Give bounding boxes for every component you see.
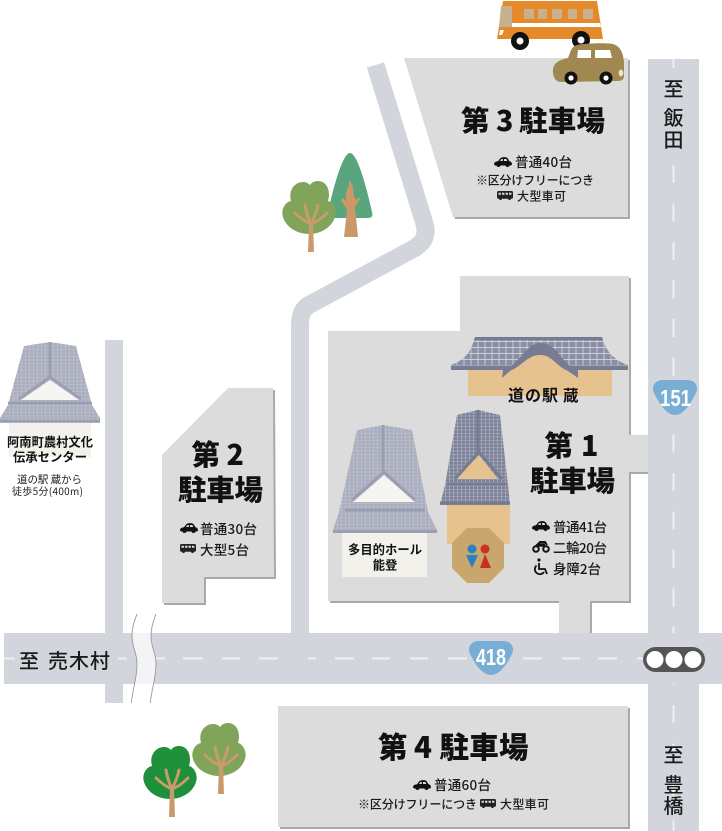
- heading: lot 1: 駐車場: [530, 459, 615, 500]
- icon: restroom sign: [452, 528, 504, 583]
- heading: lot 2: 駐車場: [178, 468, 263, 509]
- note: large vehicles: 大型車可: [500, 796, 549, 812]
- illustration: light green tree: [192, 723, 246, 794]
- building: restroom hall: [440, 410, 510, 583]
- panel: parking lot 4: [278, 706, 630, 829]
- label: to Urugi village: 至: [19, 645, 39, 674]
- icon: wheelchair: [535, 558, 547, 574]
- note: lot 3: ※区分けフリーにつき: [476, 172, 594, 188]
- icon: car: [413, 780, 431, 790]
- capacity: lot 3: 普通40台: [515, 151, 572, 171]
- heading: lot 1: 第: [544, 424, 573, 465]
- label: hall name: 多目的ホール: [348, 540, 422, 558]
- road: route 418 (horizontal): [4, 633, 722, 684]
- route badge 151: [653, 380, 697, 415]
- building: multipurpose hall Noto: [333, 425, 437, 577]
- label: to Toyohashi: 豊: [664, 769, 684, 798]
- building: Michi-no-Eki Kura: [451, 337, 628, 406]
- icon: bus: [480, 799, 496, 808]
- road: winding side road: [300, 65, 426, 640]
- illustration: round tree by road: [282, 181, 336, 252]
- icon: bus: [497, 191, 513, 200]
- icon: car: [180, 523, 198, 533]
- panel: parking lot 1: [328, 276, 648, 633]
- road: national route 151 (vertical): [648, 59, 699, 831]
- illustration: orange bus: [497, 1, 603, 50]
- note: walking distance: 道の駅 蔵から: [17, 472, 82, 487]
- note: lot 4: ※区分けフリーにつき: [358, 796, 477, 812]
- label: to Urugi village: [19, 645, 110, 674]
- heading: lot 4: 第: [378, 725, 408, 767]
- label: to Iida: 至: [664, 73, 684, 102]
- note: walking distance: [12, 472, 83, 498]
- heading: lot 3: 3: [496, 99, 513, 140]
- route badge 151: 151: [660, 385, 691, 411]
- capacity: regular cars: 普通41台: [553, 516, 607, 536]
- label: to Urugi village: 売木村: [48, 645, 110, 674]
- heading: lot 1: 1: [581, 424, 598, 465]
- heading: lot 2: 第: [192, 433, 220, 474]
- road: left vertical road: [105, 340, 123, 703]
- heading: lot 3: 第: [461, 99, 490, 140]
- illustration: tan car: [553, 43, 624, 84]
- panel: parking lot 3: [404, 58, 630, 219]
- note: large vehicles: 大型車可: [517, 188, 566, 204]
- heading: lot 4: 駐車場: [440, 725, 528, 767]
- label: to Toyohashi: 橋: [664, 790, 684, 819]
- traffic signal: [643, 647, 705, 672]
- panel: parking lot 2: [162, 388, 276, 605]
- route badge 418: 418: [476, 644, 506, 670]
- capacity: large vehicles: 大型5台: [200, 539, 249, 559]
- label: to Iida: 飯: [664, 102, 684, 131]
- label: Michi-no-Eki Kura: 蔵: [563, 384, 579, 406]
- heading: lot 1: [530, 424, 615, 500]
- icon: car: [532, 521, 550, 531]
- capacity: lot 4: 普通60台: [434, 774, 491, 794]
- illustration: conifer tree: [328, 153, 372, 237]
- heading: lot 3: 駐車場: [519, 99, 605, 140]
- label: center name: 伝承センター: [13, 448, 87, 466]
- note: walking distance: 徒歩5分(400m): [12, 483, 83, 498]
- capacity: motorcycles: 二輪20台: [553, 537, 607, 557]
- label: to Iida: 田: [664, 124, 684, 153]
- heading: lot 4: 4: [414, 725, 432, 767]
- label: center name: [7, 432, 94, 466]
- heading: lot 3: [461, 99, 605, 140]
- heading: lot 4: [378, 725, 528, 767]
- label: to Toyohashi: 至: [664, 739, 684, 768]
- illustration: dark green tree: [143, 746, 197, 817]
- label: center name: 阿南町農村文化: [7, 432, 94, 450]
- label: to Toyohashi: [664, 739, 684, 819]
- icon: motorcycle: [533, 542, 549, 552]
- label: Michi-no-Eki Kura: 道の駅: [508, 382, 558, 406]
- heading: lot 2: [178, 433, 263, 509]
- capacity: accessible: 身障2台: [553, 558, 601, 578]
- heading: lot 2: 2: [226, 433, 244, 474]
- icon: car: [494, 157, 512, 167]
- label: hall name: [348, 540, 422, 574]
- label: to Iida: [664, 73, 684, 153]
- label: hall name: 能登: [373, 556, 398, 574]
- icon: bus: [180, 544, 196, 553]
- building: Anan farm village culture center: [0, 342, 100, 498]
- route badge 418: [469, 641, 513, 675]
- road break mark: [132, 614, 156, 703]
- capacity: regular cars: 普通30台: [200, 518, 257, 538]
